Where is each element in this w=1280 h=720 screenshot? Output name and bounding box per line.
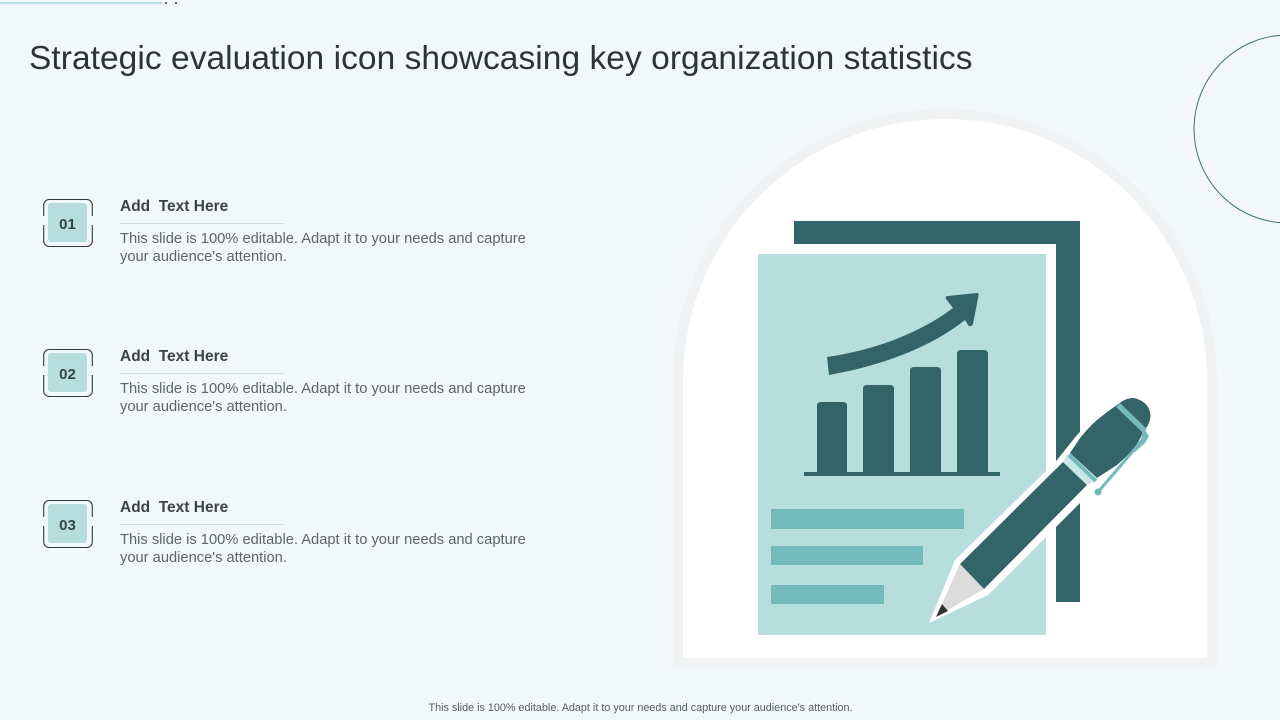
description 01: This slide is 100% editable. Adapt it to your needs and capture: [120, 231, 526, 247]
description 01: [120, 231, 526, 265]
pen collar band: [1069, 455, 1096, 481]
heading 02: Add Text Here: [120, 348, 228, 365]
description 02: your audience's attention.: [120, 399, 287, 415]
arch panel: [678, 114, 1212, 663]
pen clip: [1132, 427, 1149, 452]
pen collar: [1063, 453, 1096, 485]
description 01: your audience's attention.: [120, 249, 287, 265]
description 03: your audience's attention.: [120, 550, 287, 566]
description 02: This slide is 100% editable. Adapt it to your needs and capture: [120, 381, 526, 397]
footer note: This slide is 100% editable. Adapt it to your needs and capture your audience's attention.: [428, 702, 852, 714]
pen cap band: [1118, 405, 1145, 431]
bar chart: [804, 350, 1000, 476]
pen cap: [1070, 398, 1150, 478]
list item 01: [43, 198, 526, 265]
heading 01: Add Text Here: [120, 198, 228, 215]
badge 01: 01: [59, 216, 76, 233]
description 02: [120, 381, 526, 415]
pen tip: [936, 564, 984, 617]
top accent dots: [165, 2, 177, 4]
description 03: [120, 532, 526, 566]
pen: [929, 394, 1154, 623]
badge 01: [43, 199, 93, 247]
front page: [758, 254, 1046, 635]
pen outline: [929, 394, 1154, 623]
badge 03: [43, 500, 93, 548]
list item 02: [43, 348, 526, 415]
badge 02: [43, 349, 93, 397]
badge 03: 03: [59, 517, 76, 534]
back page: [794, 221, 1080, 602]
badge 02: 02: [59, 366, 76, 383]
description 03: This slide is 100% editable. Adapt it to your needs and capture: [120, 532, 526, 548]
pen barrel: [960, 462, 1087, 589]
text lines: [771, 509, 964, 604]
growth arrow: [827, 293, 979, 375]
title: Strategic evaluation icon showcasing key organization statistics: [29, 40, 973, 77]
list item 03: [43, 499, 526, 566]
top accent line: [0, 2, 162, 4]
heading 03: Add Text Here: [120, 499, 228, 516]
